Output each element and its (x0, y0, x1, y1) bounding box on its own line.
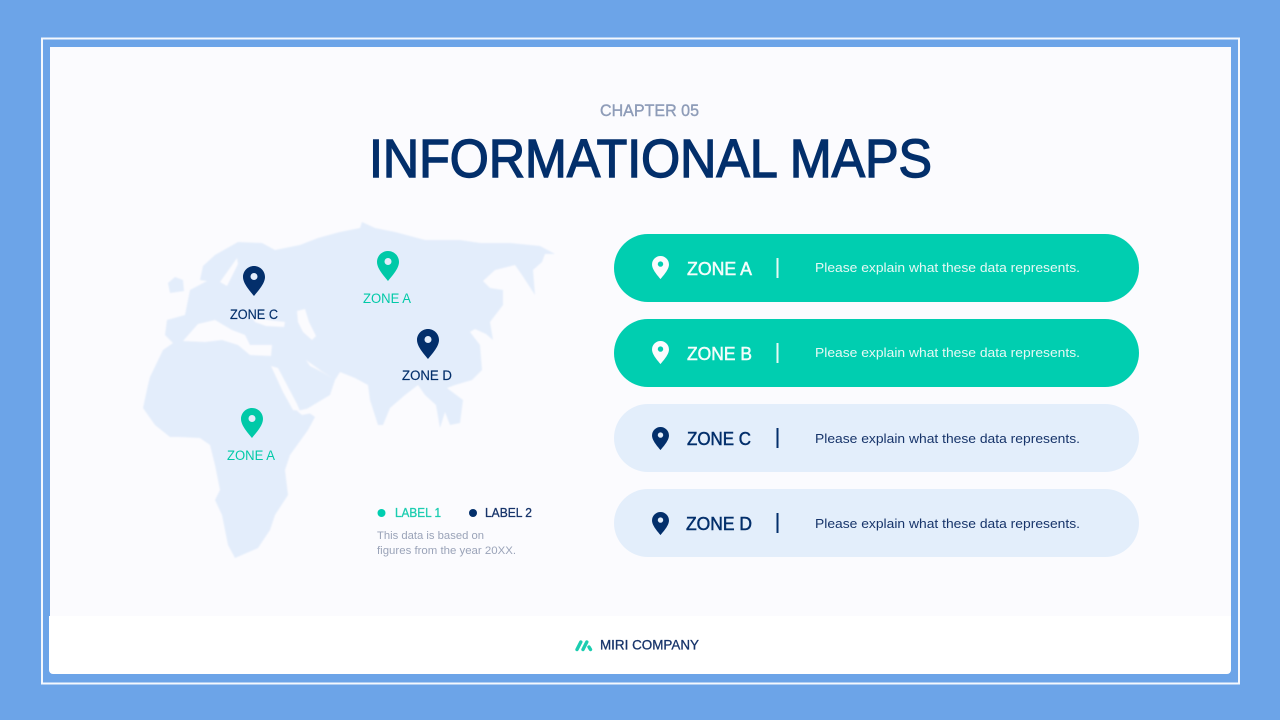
map label: zone C: ZONE C (230, 307, 278, 322)
row heading: ZONE A (687, 259, 752, 279)
data note: figures from the year 20XX. (377, 545, 516, 557)
main panel (50, 47, 1231, 617)
icon: pin (652, 427, 669, 450)
icon: pin (652, 512, 669, 535)
seas (183, 258, 332, 415)
panel: zone A row (614, 234, 1139, 302)
row description: Please explain what these data represents. (815, 260, 1080, 275)
map pin: zone A north (377, 251, 399, 281)
world map (143, 222, 555, 558)
icon: pin (652, 256, 669, 279)
panel: zone B row (614, 319, 1139, 387)
map label: zone A north: ZONE A (363, 291, 411, 306)
map pin: zone D (417, 329, 439, 359)
row heading: ZONE C (687, 429, 751, 449)
map pin: zone A south (241, 408, 263, 438)
map label: zone D: ZONE D (402, 368, 452, 383)
row heading: ZONE B (687, 344, 752, 364)
row description: Please explain what these data represents. (815, 345, 1080, 360)
legend item: label 1 (378, 506, 441, 520)
map pin: zone C (243, 266, 265, 296)
data note (377, 530, 516, 557)
landmass (143, 222, 555, 558)
row description: Please explain what these data represents. (815, 431, 1080, 446)
panel: zone D row (614, 489, 1139, 557)
chapter label: CHAPTER 05 (600, 101, 699, 120)
title: INFORMATIONAL MAPS (369, 129, 932, 189)
panel: zone C row (614, 404, 1139, 472)
row heading: ZONE D (686, 514, 752, 534)
company logo (577, 642, 590, 650)
row description: Please explain what these data represents. (815, 516, 1080, 531)
icon: pin (652, 341, 669, 364)
legend (378, 506, 532, 520)
map label: zone A south: ZONE A (227, 448, 275, 463)
data note: This data is based on (377, 530, 484, 542)
legend item: label 2: LABEL 2 (485, 506, 532, 520)
legend item: label 1: LABEL 1 (395, 506, 441, 520)
footer bar (49, 616, 1231, 674)
company name: MIRI COMPANY (600, 636, 700, 652)
